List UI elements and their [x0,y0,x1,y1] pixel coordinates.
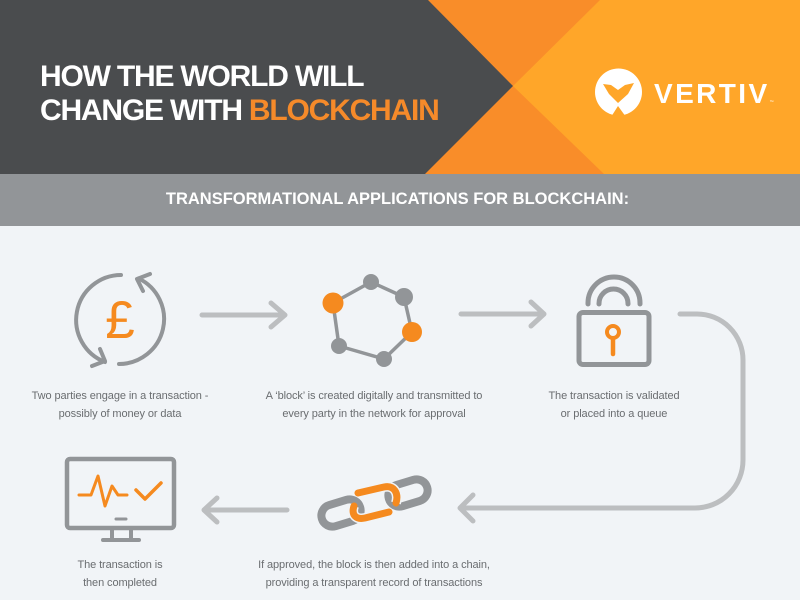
icon: chain links [319,477,430,529]
caption: step 1: Two parties engage in a transaction - [32,390,208,402]
arrow: step 4 to 5 [204,498,287,522]
caption: step 4 [258,559,490,589]
title: HOW THE WORLD WILL [40,60,363,93]
caption: step 3 [548,390,680,420]
section heading band [0,174,800,226]
caption: step 2: A ‘block’ is created digitally and transmitted to [266,390,482,402]
title [40,60,439,127]
caption: step 3: or placed into a queue [561,408,667,420]
connector arrow: step 3 around to 4 [460,314,743,521]
caption: step 5 [77,559,163,589]
caption: step 2 [266,390,482,420]
header banner background [0,0,800,174]
icon: padlock [579,277,649,364]
Vertiv logo [595,68,774,115]
caption: step 1 [32,390,208,420]
caption: step 5: then completed [83,577,157,589]
caption: step 1: possibly of money or data [59,408,181,420]
section heading band: TRANSFORMATIONAL APPLICATIONS FOR BLOCKCHAIN: [166,190,629,208]
icon: monitor with check [67,459,174,540]
arrow: step 2 to 3 [461,302,544,326]
icon: currency exchange [76,274,164,366]
caption: step 3: The transaction is validated [548,390,680,402]
caption: step 2: every party in the network for approval [282,408,466,420]
process diagram [64,272,746,542]
icon: network block [322,274,422,367]
caption: step 4: providing a transparent record of transactions [266,577,482,589]
arrow: step 1 to 2 [202,303,285,327]
caption: step 4: If approved, the block is then added into a chain, [258,559,490,571]
icon: currency exchange: £ [105,291,135,350]
title: CHANGE WITH BLOCKCHAIN [40,94,439,127]
logo wordmark: VERTIV™ [654,78,774,109]
caption: step 5: The transaction is [77,559,163,571]
icon: logo mark [595,68,642,117]
